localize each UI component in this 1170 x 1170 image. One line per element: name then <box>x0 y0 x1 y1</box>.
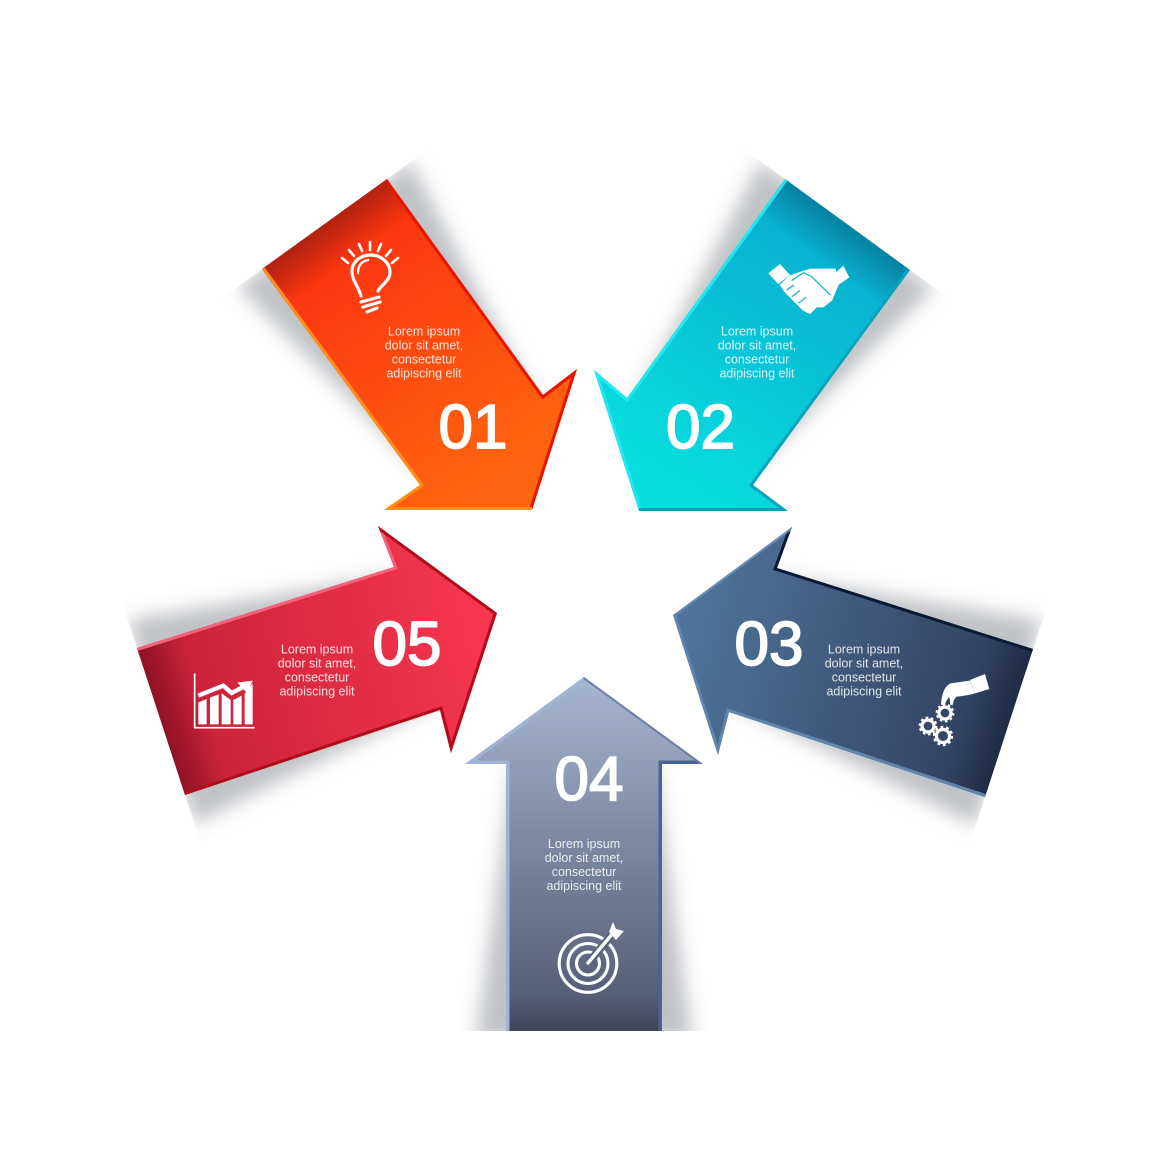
icon: target <box>559 922 624 992</box>
text 02: Lorem ipsum <box>721 324 793 338</box>
arrow 05 body <box>137 526 497 795</box>
number 05: 05 <box>373 610 441 679</box>
arrow 01 <box>238 161 577 510</box>
text 01: Lorem ipsum <box>388 324 460 338</box>
text 01: adipiscing elit <box>386 366 462 380</box>
text 03: adipiscing elit <box>826 684 902 698</box>
text 03: Lorem ipsum <box>828 642 900 656</box>
arrow 03 <box>673 527 1042 826</box>
text 05: adipiscing elit <box>279 684 355 698</box>
text 02: adipiscing elit <box>719 366 795 380</box>
text 03: consectetur <box>832 670 896 684</box>
text 02: dolor sit amet, <box>718 338 796 352</box>
arrow 03 body <box>673 527 1033 797</box>
text 03: dolor sit amet, <box>825 656 903 670</box>
text 04: Lorem ipsum <box>548 837 620 851</box>
text 05: Lorem ipsum <box>281 642 353 656</box>
number 04: 04 <box>555 745 623 814</box>
number 03: 03 <box>735 610 803 679</box>
arrow 01 body <box>262 179 577 510</box>
text 05: consectetur <box>285 670 349 684</box>
icon: light bulb <box>342 242 398 312</box>
text 05: dolor sit amet, <box>278 656 356 670</box>
text 04: consectetur <box>552 865 616 879</box>
shadow of arrow 05 <box>128 575 438 824</box>
arrow 02 body <box>594 179 910 511</box>
text 01: consectetur <box>392 352 456 366</box>
icon: hand with gears <box>920 674 989 745</box>
number 01: 01 <box>439 393 507 462</box>
icon: growth chart <box>195 673 255 728</box>
text 02: consectetur <box>725 352 789 366</box>
arrow 04 <box>465 677 703 1040</box>
text 04: adipiscing elit <box>546 879 622 893</box>
shadow of arrow 01 <box>238 161 535 478</box>
icon: handshake <box>768 264 849 313</box>
text 01: dolor sit amet, <box>385 338 463 352</box>
arrow 05 <box>128 526 497 824</box>
arrow 04 body <box>465 677 703 1031</box>
shadow of arrow 02 <box>635 161 934 478</box>
text 04: dolor sit amet, <box>545 851 623 865</box>
shadow of arrow 04 <box>476 770 692 1040</box>
number 02: 02 <box>666 393 735 462</box>
arrow 02 <box>594 161 934 511</box>
shadow of arrow 03 <box>735 577 1042 826</box>
